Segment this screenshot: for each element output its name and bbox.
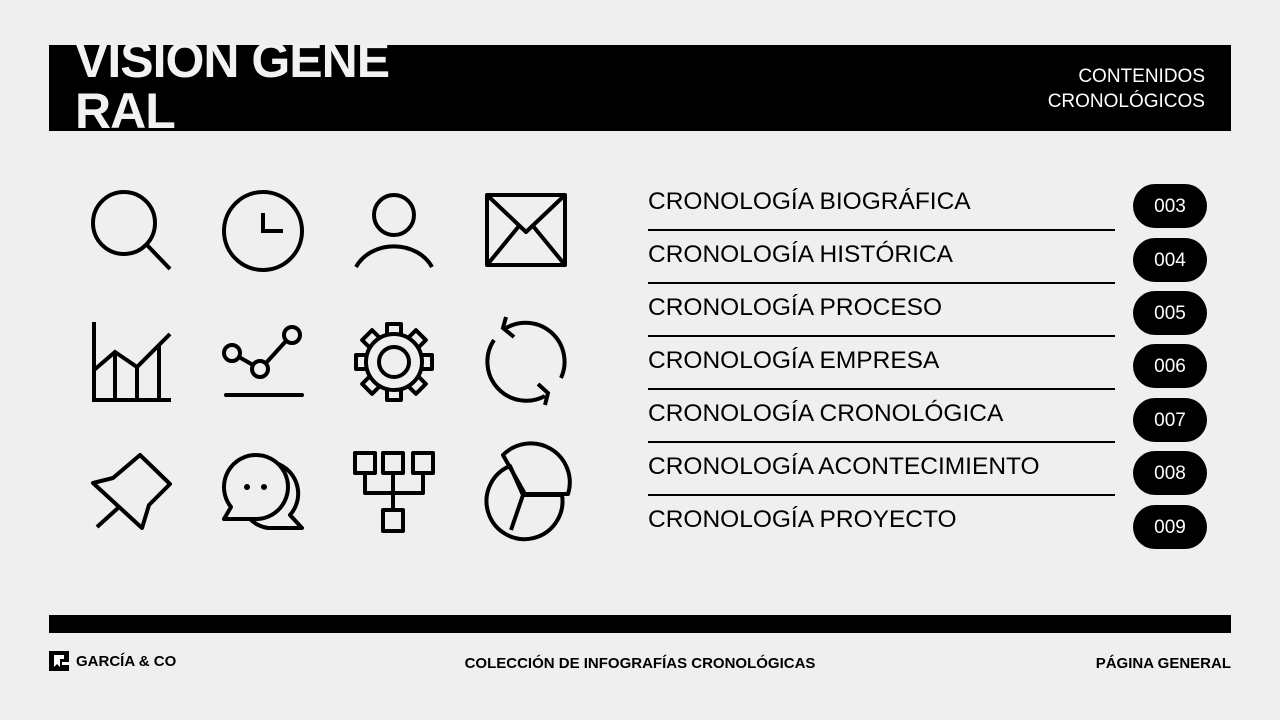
footer center text: COLECCIÓN DE INFOGRAFÍAS CRONOLÓGICAS <box>465 655 815 672</box>
footer bar <box>49 615 1231 633</box>
chronology list <box>648 184 1207 549</box>
footer logo <box>49 651 176 671</box>
footer right text: PÁGINA GENERAL <box>1096 655 1231 672</box>
pill 003 <box>1133 184 1207 228</box>
icon: hierarchy <box>355 453 433 531</box>
item 5 <box>648 390 1115 443</box>
item 6 <box>648 443 1115 496</box>
header bar <box>49 45 1231 131</box>
pill 008: 008 <box>1154 463 1186 484</box>
pill 006: 006 <box>1154 356 1186 377</box>
icon: user <box>356 195 432 267</box>
item 2 <box>648 231 1115 284</box>
pill 007: 007 <box>1154 410 1186 431</box>
icon: pie <box>486 443 570 539</box>
pill 005 <box>1133 291 1207 335</box>
subtitle: CRONOLÓGICOS <box>1048 91 1205 112</box>
pill 006 <box>1133 344 1207 388</box>
icon: envelope <box>487 195 565 265</box>
pill 005: 005 <box>1154 303 1186 324</box>
pill 003: 003 <box>1154 196 1186 217</box>
item 1 <box>648 178 1115 231</box>
icon: pin <box>93 455 170 528</box>
item 6: CRONOLOGÍA ACONTECIMIENTO <box>648 453 1040 480</box>
icon: refresh <box>487 317 565 405</box>
icon: line chart <box>224 327 302 395</box>
icon: clock <box>224 192 302 270</box>
subtitle: CONTENIDOS <box>1078 66 1205 87</box>
pill 004 <box>1133 238 1207 282</box>
pill 009 <box>1133 505 1207 549</box>
pill 004: 004 <box>1154 250 1186 271</box>
icon: search <box>93 192 170 269</box>
icon: logo <box>49 651 69 671</box>
icon: bar chart <box>94 322 171 400</box>
item 3 <box>648 284 1115 337</box>
footer logo: GARCÍA & CO <box>76 652 176 670</box>
icon: chat <box>224 455 302 528</box>
item 4: CRONOLOGÍA EMPRESA <box>648 347 939 374</box>
item 4 <box>648 337 1115 390</box>
pill 009: 009 <box>1154 517 1186 538</box>
item 2: CRONOLOGÍA HISTÓRICA <box>648 241 953 268</box>
item 5: CRONOLOGÍA CRONOLÓGICA <box>648 400 1003 427</box>
item 3: CRONOLOGÍA PROCESO <box>648 294 942 321</box>
item 7: CRONOLOGÍA PROYECTO <box>648 506 957 533</box>
title overflow part <box>75 131 175 134</box>
title <box>75 45 389 131</box>
icon grid <box>90 190 572 542</box>
icon: gear <box>356 324 432 400</box>
pill 008 <box>1133 451 1207 495</box>
item 1: CRONOLOGÍA BIOGRÁFICA <box>648 188 971 215</box>
pill 007 <box>1133 398 1207 442</box>
subtitle <box>1048 66 1205 112</box>
